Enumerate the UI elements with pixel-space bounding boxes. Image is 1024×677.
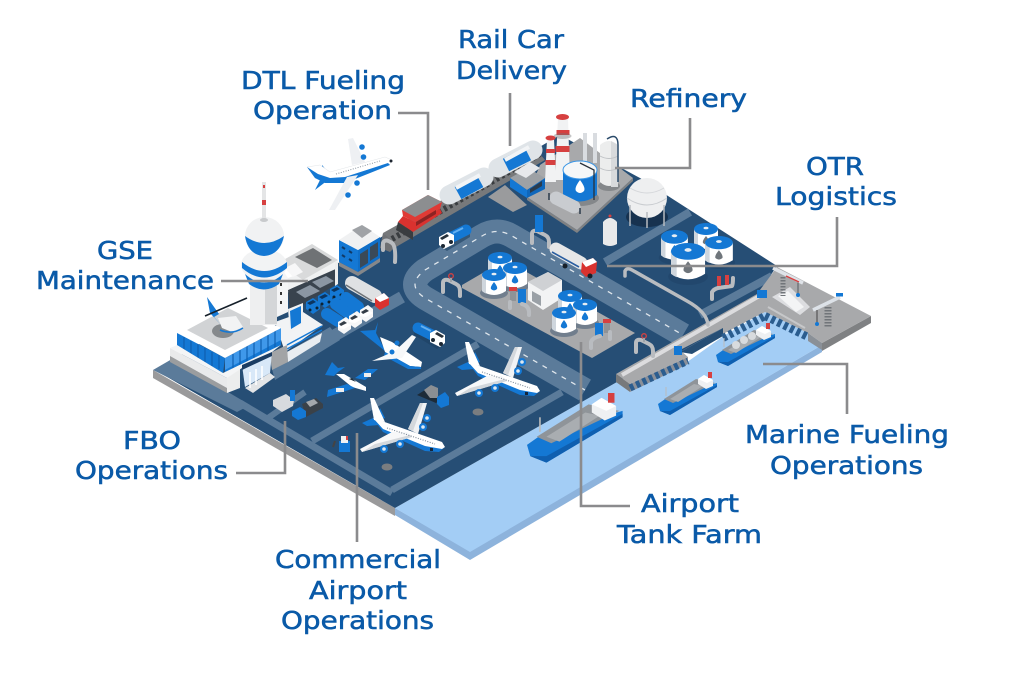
label: Airport Tank Farm bbox=[616, 489, 762, 549]
fbo service vehicles bbox=[273, 390, 323, 420]
label: Commercial Airport Operations: Operations bbox=[281, 606, 434, 635]
refinery: columns bbox=[583, 133, 620, 191]
blue trucks bbox=[414, 228, 470, 349]
parked jet bbox=[360, 322, 422, 369]
label: DTL Fueling Operation bbox=[241, 66, 405, 125]
gray pier and dock bbox=[616, 267, 871, 384]
label: Refinery: Refinery bbox=[630, 84, 747, 113]
label: Marine Fueling Operations bbox=[745, 420, 949, 480]
ship: dock tanker bbox=[716, 323, 775, 366]
train: locomotive bbox=[396, 195, 442, 240]
label: OTR Logistics: OTR bbox=[806, 152, 864, 181]
small blue building near rail bbox=[510, 162, 545, 198]
billboard bbox=[288, 303, 303, 333]
refinery: spherical tank bbox=[626, 178, 668, 228]
terminal: base bbox=[170, 348, 275, 393]
leader lines bbox=[221, 93, 847, 542]
apron service vehicle bbox=[417, 385, 449, 408]
ground surface: navy site bbox=[155, 135, 777, 508]
refinery: blue storage tank bbox=[561, 161, 599, 206]
rail bed bbox=[383, 148, 545, 247]
terminal roof with helipad bbox=[177, 304, 281, 358]
gse vehicles: service trucks bbox=[306, 285, 344, 314]
road centre dashes bbox=[415, 232, 683, 390]
refinery base bbox=[488, 138, 633, 233]
platform side: gray front edge bbox=[153, 370, 395, 516]
dock pillars bbox=[616, 316, 822, 392]
tank farm tanks and office bbox=[480, 252, 599, 337]
label: Rail Car Delivery bbox=[456, 25, 567, 85]
otr valves bbox=[712, 275, 733, 299]
roads and taxi strips bbox=[153, 212, 772, 493]
dock dark wedge bbox=[680, 328, 723, 354]
flying airplane bbox=[307, 138, 392, 210]
label: GSE Maintenance bbox=[36, 236, 214, 295]
tank farm plate bbox=[462, 260, 635, 358]
label: FBO Operations: Operations bbox=[75, 456, 228, 485]
pier white pipeline bbox=[622, 294, 763, 375]
label: OTR Logistics bbox=[775, 152, 897, 211]
refinery: horizontal tank bbox=[549, 193, 580, 214]
label: FBO Operations: FBO bbox=[123, 426, 181, 455]
dock stripes bbox=[768, 307, 805, 328]
label: Commercial Airport Operations bbox=[275, 545, 441, 635]
label: Commercial Airport Operations: Commercial bbox=[275, 545, 441, 574]
refinery: small vertical tank bbox=[603, 214, 617, 246]
label: GSE Maintenance: Maintenance bbox=[36, 266, 214, 295]
label: Airport Tank Farm: Tank Farm bbox=[616, 520, 762, 549]
terminal: annex with stripes bbox=[270, 312, 323, 370]
cranes on pier bbox=[674, 268, 843, 355]
pier side: gray edge bbox=[822, 316, 871, 351]
label: OTR Logistics: Logistics bbox=[775, 182, 897, 211]
label: Marine Fueling Operations: Operations bbox=[770, 451, 923, 480]
label: Airport Tank Farm: Airport bbox=[641, 489, 739, 518]
label: DTL Fueling Operation: DTL Fueling bbox=[241, 66, 405, 95]
gse hangar bbox=[277, 244, 338, 317]
tank farm office bbox=[528, 272, 562, 310]
label: FBO Operations bbox=[75, 426, 228, 485]
otr tanks bbox=[659, 223, 735, 285]
platform side: water front edge bbox=[395, 345, 822, 560]
gse fuel tanker bbox=[346, 283, 389, 310]
label: Marine Fueling Operations: Marine Fueling bbox=[745, 420, 949, 449]
label: Rail Car Delivery: Delivery bbox=[456, 56, 567, 85]
parked airliner front bbox=[360, 398, 445, 453]
control tower bbox=[241, 182, 287, 325]
ship: middle tanker bbox=[658, 372, 717, 415]
parked airliner rear bbox=[455, 342, 540, 397]
water surface bbox=[395, 312, 822, 552]
label: GSE Maintenance: GSE bbox=[97, 236, 153, 265]
ships bbox=[527, 323, 775, 463]
blue office building bbox=[339, 225, 397, 276]
label: DTL Fueling Operation: Operation bbox=[253, 96, 392, 125]
parked propeller plane bbox=[325, 362, 378, 397]
forklift bbox=[333, 436, 350, 452]
terminal: upper floors with glass bbox=[170, 328, 281, 388]
fuel dispensers at tank farm bbox=[509, 287, 611, 348]
helicopter bbox=[205, 297, 247, 338]
ship: large tanker bbox=[527, 393, 623, 463]
gse vehicles: tank trucks bbox=[327, 298, 373, 334]
train: tanker car 1 bbox=[449, 175, 484, 195]
refinery: chimneys bbox=[545, 114, 572, 182]
manholes bbox=[382, 408, 484, 470]
label: Rail Car Delivery: Rail Car bbox=[458, 25, 565, 54]
label: Commercial Airport Operations: Airport bbox=[309, 576, 407, 605]
long pipeline bbox=[625, 269, 708, 325]
road tanker truck bbox=[552, 249, 597, 278]
pipe valves bbox=[443, 215, 653, 356]
train: tanker car 2 bbox=[498, 147, 533, 168]
pipe near rail bbox=[383, 240, 395, 262]
